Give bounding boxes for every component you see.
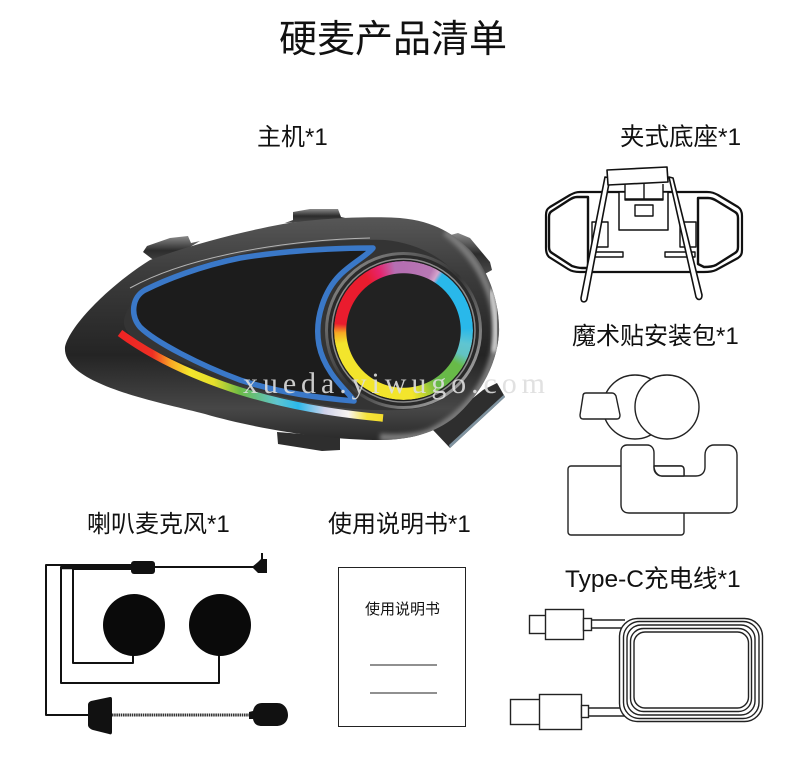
recessed panel — [124, 240, 480, 410]
title: 硬麦产品清单 — [279, 19, 507, 61]
label: velcro kit: 魔术贴安装包*1 — [572, 323, 739, 350]
body — [65, 217, 499, 440]
label: manual: 使用说明书*1 — [328, 511, 471, 538]
top buttons — [143, 209, 492, 275]
plate outline — [546, 192, 742, 272]
icon: headset main unit — [64, 209, 505, 451]
label: main unit: 主机*1 — [257, 124, 328, 151]
label: clip mount: 夹式底座*1 — [620, 124, 741, 151]
bottom buttons — [277, 383, 505, 451]
top bar — [607, 167, 668, 185]
metal edge highlight — [380, 232, 496, 437]
label: Type-C cable: Type-C充电线*1 — [565, 566, 741, 593]
slots — [592, 222, 608, 247]
watermark: xueda.yiwugo.com — [243, 367, 545, 400]
icon: dial rainbow ring — [334, 261, 473, 400]
dial bezel — [326, 254, 480, 408]
rainbow strip — [120, 333, 383, 418]
legs — [581, 177, 610, 302]
center block — [619, 192, 668, 230]
label: speaker and microphone: 喇叭麦克风*1 — [87, 511, 230, 538]
blue outline panel — [134, 248, 373, 401]
manual cover text: 使用说明书 — [365, 601, 440, 618]
